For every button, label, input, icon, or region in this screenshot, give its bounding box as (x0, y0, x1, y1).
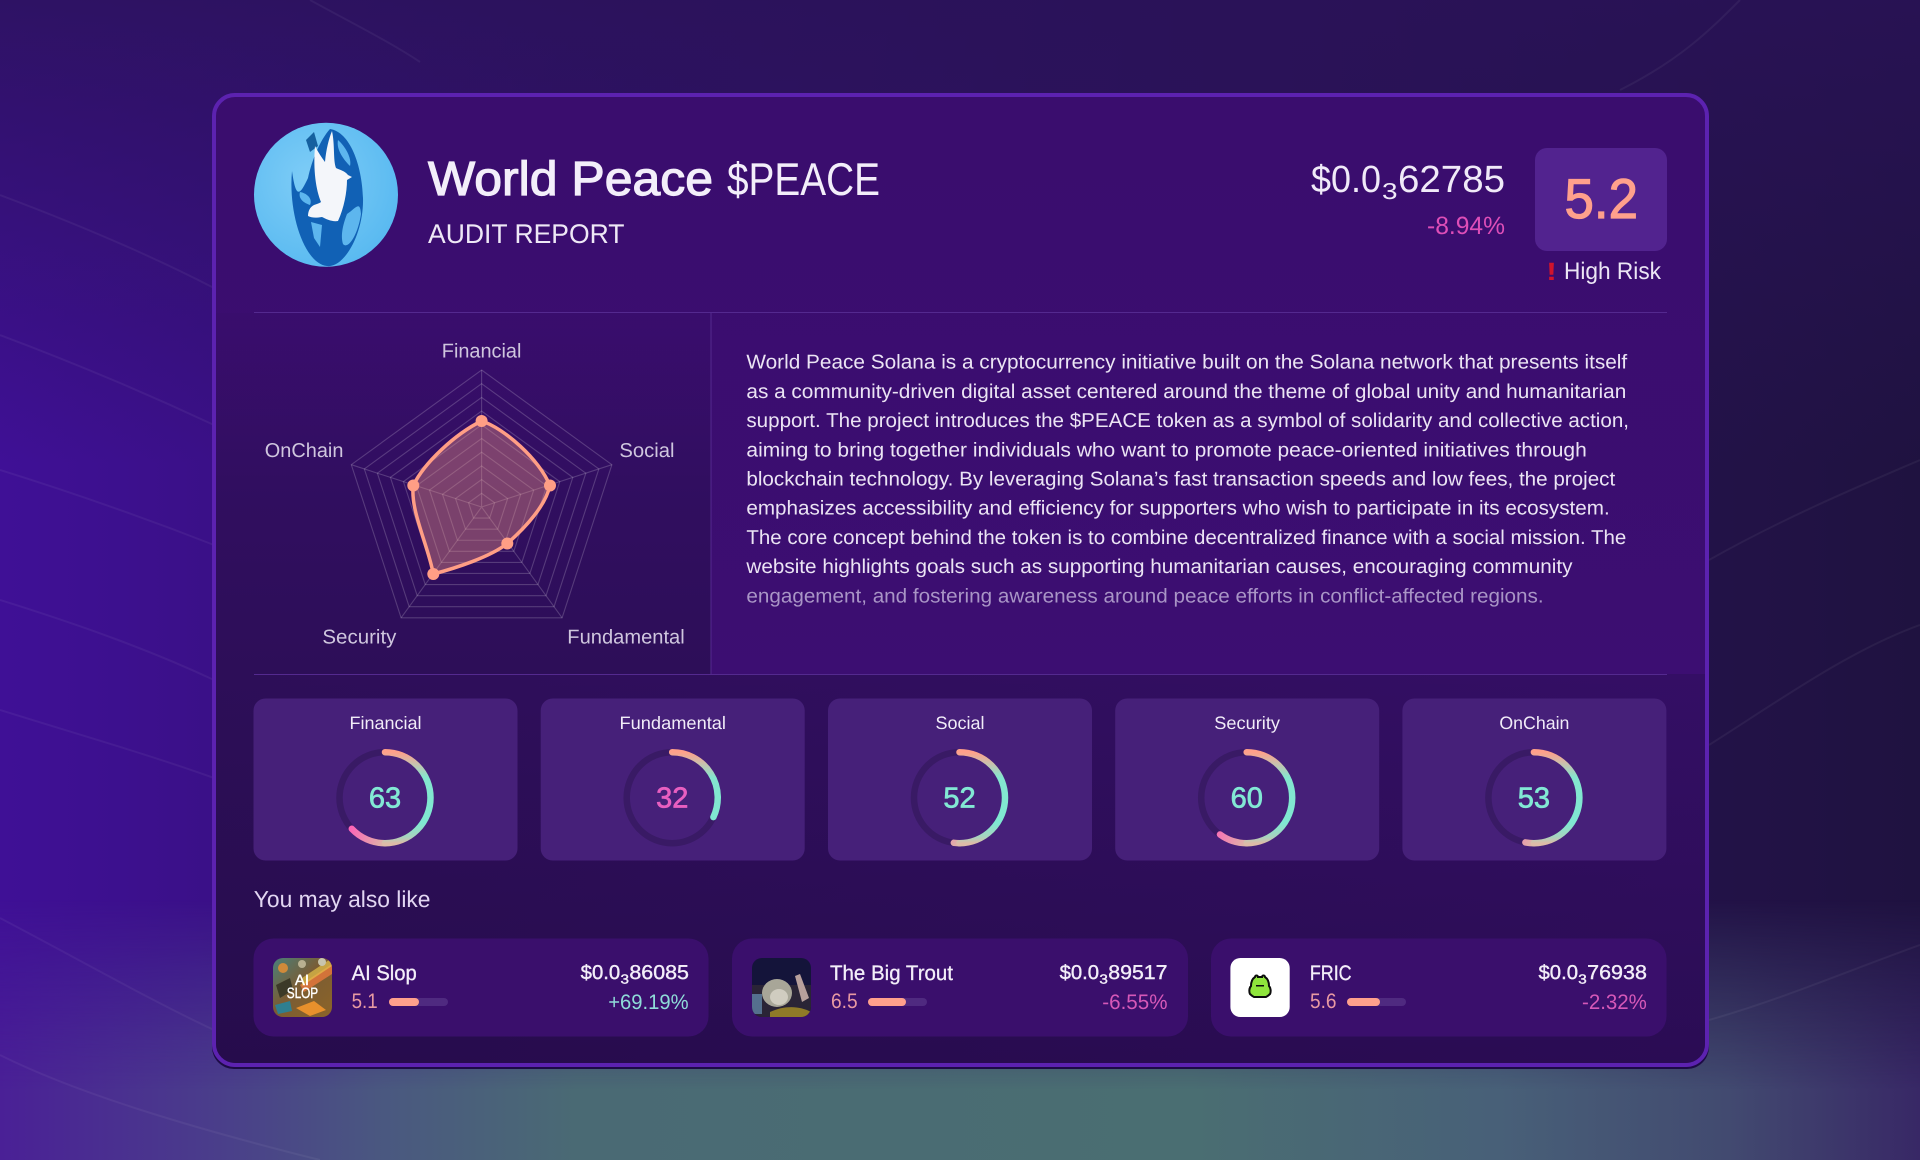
panel: score fundamental: 32 (656, 783, 688, 815)
panel: score social: Social (936, 713, 984, 733)
panel: report card (212, 94, 1709, 1069)
risk label: ! (1546, 258, 1557, 286)
panel: The Big Trout recommendation: 89517 (1108, 962, 1168, 984)
chart: radar (265, 340, 685, 649)
panel: The Big Trout recommendation: $0.0 (1060, 962, 1099, 984)
risk label: High Risk (1564, 258, 1662, 285)
panel: score fundamental (541, 698, 805, 860)
panel: FRIC recommendation: 76938 (1587, 962, 1647, 984)
icon: FRIC thumbnail (1230, 958, 1290, 1017)
panel: score social (828, 698, 1092, 860)
panel: score fundamental: Fundamental (620, 713, 726, 733)
chart: radar: Security (322, 627, 396, 649)
icon: AI Slop thumbnail: SLOP (287, 985, 318, 1002)
panel: AI Slop recommendation: +69.19% (608, 991, 689, 1014)
panel: FRIC recommendation (1211, 938, 1666, 1036)
panel: score social: 52 (943, 783, 976, 815)
panel: AI Slop recommendation: $0.0 (581, 962, 620, 984)
price: 62785 (1398, 159, 1505, 201)
panel: AI Slop recommendation: 3 (620, 972, 629, 986)
panel: score security (1115, 698, 1379, 860)
panel: FRIC recommendation: FRIC (1310, 962, 1352, 985)
score badge (1535, 148, 1667, 251)
text block: project description: website highlights goals such as supporting humanitarian causes, encouraging community (745, 556, 1572, 578)
panel: AI Slop recommendation: 86085 (629, 962, 689, 984)
panel: The Big Trout recommendation: 3 (1099, 972, 1108, 986)
panel: score financial: Financial (350, 713, 422, 733)
heading: you may also like: You may also like (254, 886, 430, 912)
subtitle: AUDIT REPORT (428, 219, 624, 249)
panel: The Big Trout recommendation (732, 938, 1188, 1036)
text block: project description: engagement, and fostering awareness around peace efforts in conflict-affected regions. (746, 585, 1544, 607)
text block: project description: World Peace Solana is a cryptocurrency initiative built on the Solana network that presents itself (746, 352, 1628, 374)
panel: AI Slop recommendation: AI Slop (352, 962, 417, 985)
text block: project description: The core concept behind the token is to combine decentralized finance with a social mission. The (746, 527, 1626, 549)
chart: radar: Financial (442, 340, 521, 362)
chart: radar: Social (619, 440, 674, 462)
panel: score security: Security (1214, 713, 1280, 733)
panel: The Big Trout recommendation: -6.55% (1102, 991, 1168, 1014)
chart: radar: Fundamental (567, 627, 685, 649)
panel: score onchain (1402, 698, 1666, 860)
panel: FRIC recommendation: $0.0 (1538, 962, 1578, 984)
panel: score security: 60 (1231, 783, 1263, 815)
panel: FRIC recommendation: 5.6 (1310, 990, 1336, 1013)
panel: AI Slop recommendation: 5.1 (352, 990, 378, 1013)
chart: radar: OnChain (265, 440, 343, 462)
panel: The Big Trout recommendation: The Big Trout (830, 962, 953, 985)
panel: score financial (254, 698, 518, 860)
title: World Peace (428, 153, 713, 206)
price change: -8.94% (1427, 212, 1505, 240)
price: 3 (1382, 178, 1398, 204)
price: $0.0 (1311, 159, 1381, 201)
panel: The Big Trout recommendation: 6.5 (831, 990, 858, 1013)
title: $PEACE (727, 153, 880, 205)
panel: score financial: 63 (369, 783, 401, 815)
text block: project description: support. The project introduces the $PEACE token as a symbol of solidarity and collective action, (746, 410, 1629, 432)
text block: project description: blockchain technology. By leveraging Solana’s fast transaction speeds and low fees, the project (746, 468, 1616, 490)
text block: project description (745, 352, 1629, 607)
icon: The Big Trout thumbnail (752, 958, 811, 1017)
score badge: 5.2 (1564, 167, 1638, 230)
text block: project description: as a community-driven digital asset centered around the theme of global unity and humanitarian (746, 381, 1626, 403)
title (428, 153, 880, 206)
icon: AI Slop thumbnail (273, 958, 332, 1017)
text block: project description: aiming to bring together individuals who want to promote peace-oriented initiatives through (746, 439, 1587, 461)
icon: world peace logo (254, 123, 398, 267)
panel: FRIC recommendation: 3 (1578, 972, 1587, 986)
text block: project description: emphasizes accessibility and efficiency for supporters who wish to participate in its ecosystem. (746, 498, 1610, 520)
panel: score onchain: OnChain (1499, 713, 1569, 733)
panel: FRIC recommendation: -2.32% (1582, 991, 1647, 1014)
price (1311, 159, 1505, 204)
icon: AI Slop thumbnail: AI (295, 972, 309, 989)
panel: score onchain: 53 (1518, 783, 1550, 815)
panel: AI Slop recommendation (254, 938, 708, 1036)
